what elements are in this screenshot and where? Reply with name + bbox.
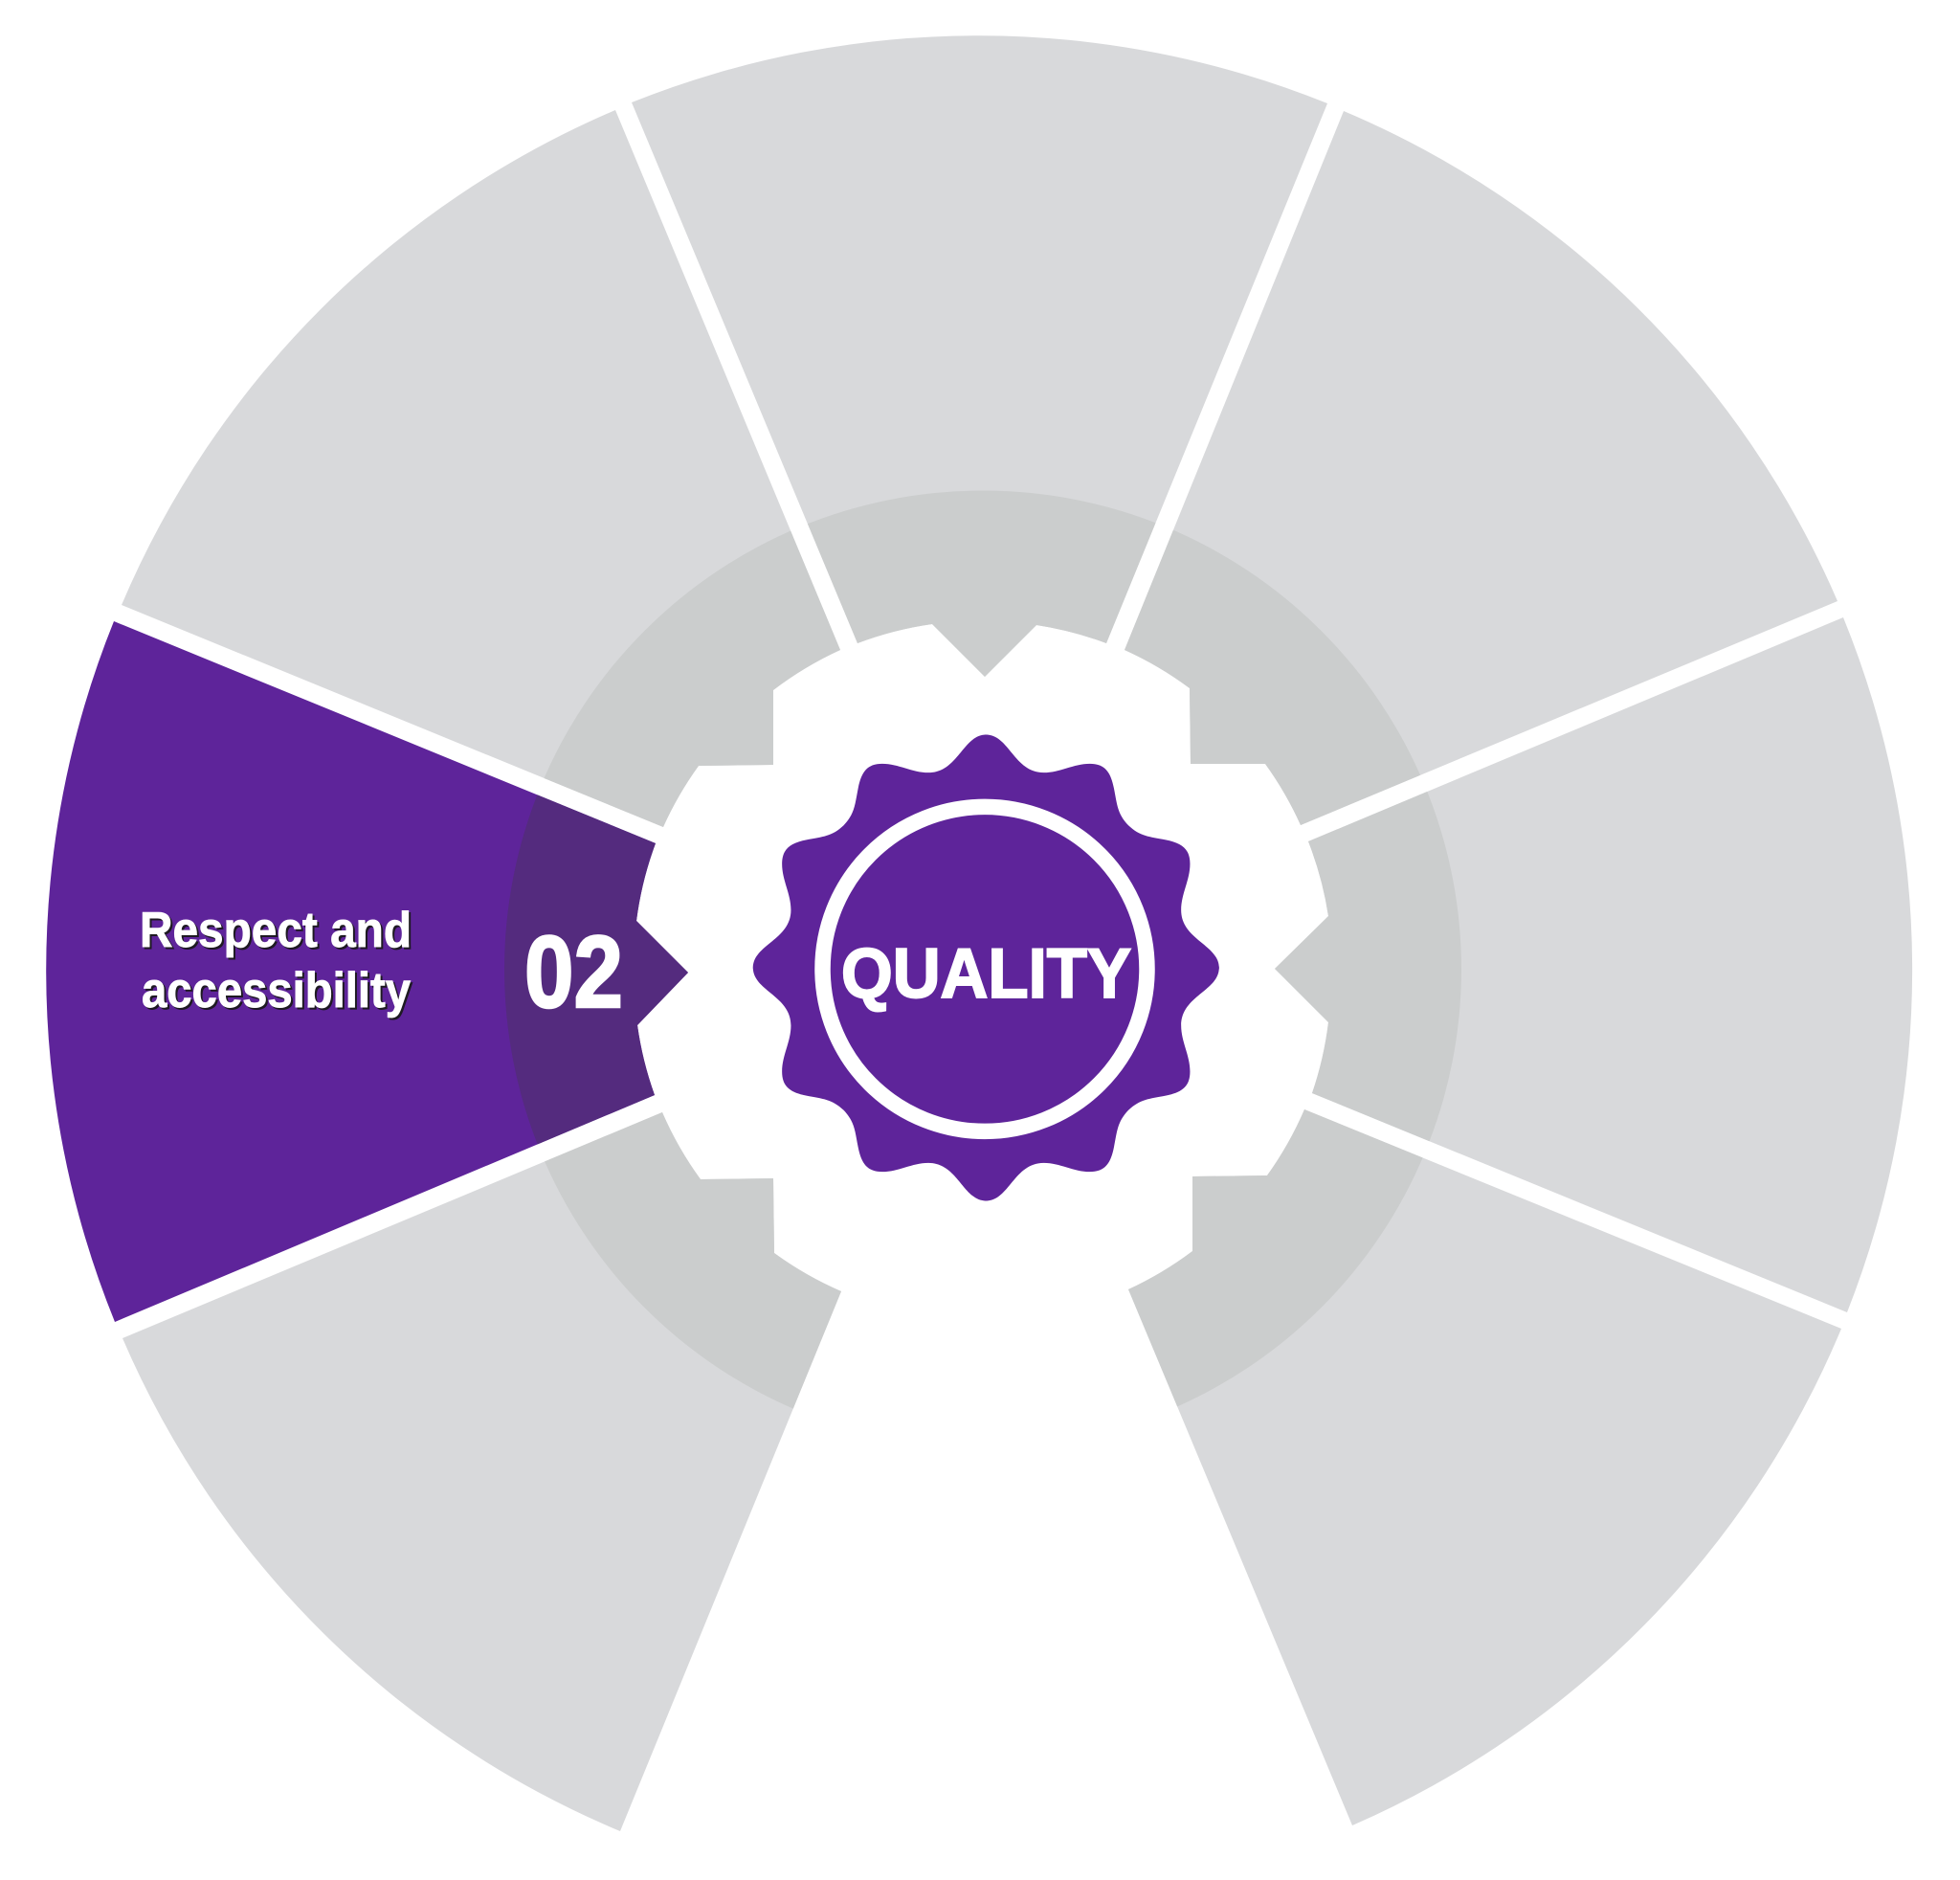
panel: top segment (632, 35, 1327, 677)
panel: bottom-left segment (122, 1112, 841, 1831)
badge text: QUALITY (841, 935, 1131, 1013)
panel: top-right segment (1125, 111, 1838, 825)
panel: bottom-right segment (1128, 1109, 1841, 1825)
number 02: 02 (524, 914, 623, 1029)
icon: quality badge (753, 735, 1219, 1200)
panel: highlighted segment 02 (46, 621, 688, 1322)
label: Respect and accessibility: accessibility (142, 963, 411, 1018)
panel: right segment (1275, 617, 1912, 1312)
panel: top-left segment (122, 110, 840, 827)
label: Respect and accessibility (140, 903, 412, 1018)
label: Respect and accessibility: Respect and (140, 903, 412, 958)
